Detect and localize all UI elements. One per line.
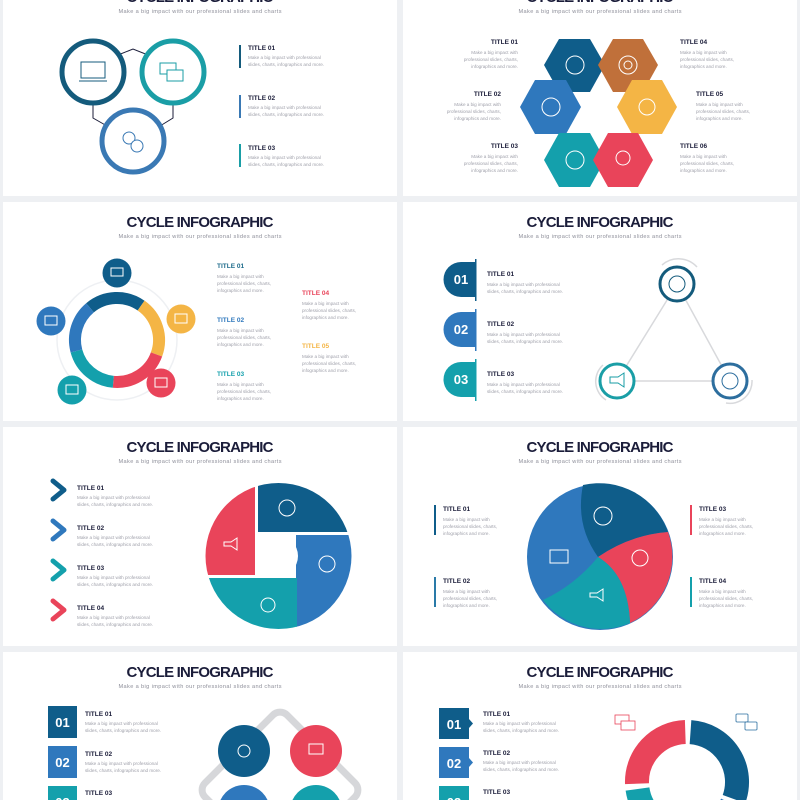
number squares (439, 708, 473, 800)
text items: slides, charts, infographics and more. (85, 728, 161, 733)
text items: TITLE 01 (85, 711, 112, 718)
subtitle: Make a big impact with our professional slides and charts (118, 234, 282, 240)
text items (217, 263, 356, 401)
text items: infographics and more. (217, 288, 264, 293)
text items: Make a big impact with (680, 50, 727, 55)
text items: TITLE 01 (483, 711, 510, 718)
text items: TITLE 06 (680, 143, 707, 150)
text items: infographics and more. (454, 116, 501, 121)
text items: TITLE 02 (483, 750, 510, 757)
heading: CYCLE INFOGRAPHIC (526, 439, 674, 456)
subtitle: Make a big impact with our professional slides and charts (518, 459, 682, 465)
text items: TITLE 03 (699, 506, 726, 513)
text items: infographics and more. (443, 531, 490, 536)
text items: TITLE 01 (248, 45, 275, 52)
text items: TITLE 03 (487, 371, 514, 378)
number badges (444, 259, 476, 401)
text items: infographics and more. (217, 396, 264, 401)
text items: TITLE 01 (217, 263, 244, 270)
number squares: 02 (55, 755, 70, 770)
text items: Make a big impact with (217, 382, 264, 387)
text items: Make a big impact with professional (77, 495, 150, 500)
text items: slides, charts, infographics and more. (483, 767, 559, 772)
text items: TITLE 02 (487, 321, 514, 328)
number squares: 02 (447, 756, 461, 771)
text items: TITLE 03 (491, 143, 518, 150)
number squares (48, 706, 77, 800)
text items: professional slides, charts, (217, 335, 271, 340)
panel: slide 4 triangle (403, 202, 797, 421)
text items: TITLE 04 (680, 39, 707, 46)
text items: professional slides, charts, (443, 524, 497, 529)
text items: infographics and more. (699, 531, 746, 536)
subtitle: Make a big impact with our professional slides and charts (518, 234, 682, 240)
panel: slide 7 diamond circles (3, 652, 397, 800)
ring chart (57, 280, 177, 400)
text items: slides, charts, infographics and more. (487, 289, 563, 294)
text items: slides, charts, infographics and more. (85, 768, 161, 773)
text items: TITLE 01 (491, 39, 518, 46)
triangle diagram (596, 259, 752, 403)
heading: CYCLE INFOGRAPHIC (126, 664, 274, 681)
text items: slides, charts, infographics and more. (483, 728, 559, 733)
text items: TITLE 05 (696, 91, 723, 98)
text items: infographics and more. (696, 116, 743, 121)
number squares: 01 (55, 715, 70, 730)
text items: TITLE 04 (699, 578, 726, 585)
text items: TITLE 03 (483, 789, 510, 796)
text items: TITLE 02 (85, 751, 112, 758)
number badges: 01 (454, 272, 468, 287)
heading: CYCLE INFOGRAPHIC (126, 439, 274, 456)
text items: TITLE 04 (77, 605, 104, 612)
panel: slide 3 ring with five icons (3, 202, 397, 421)
text items: slides, charts, infographics and more. (487, 339, 563, 344)
text items: TITLE 02 (443, 578, 470, 585)
icon circles (36, 258, 196, 404)
subtitle: Make a big impact with our professional slides and charts (118, 9, 282, 15)
text items: slides, charts, infographics and more. (487, 389, 563, 394)
text items: professional slides, charts, (696, 109, 750, 114)
text items: slides, charts, infographics and more. (77, 622, 153, 627)
text items: professional slides, charts, (302, 361, 356, 366)
text items: Make a big impact with professional (77, 575, 150, 580)
text items: slides, charts, infographics and more. (248, 112, 324, 117)
text items: infographics and more. (302, 368, 349, 373)
heading: CYCLE INFOGRAPHIC (126, 214, 274, 231)
text items: professional slides, charts, (680, 161, 734, 166)
text items: TITLE 01 (487, 271, 514, 278)
text items: professional slides, charts, (680, 57, 734, 62)
text items: Make a big impact with (302, 354, 349, 359)
text items: Make a big impact with (471, 154, 518, 159)
subtitle: Make a big impact with our professional slides and charts (518, 9, 682, 15)
text items: infographics and more. (302, 315, 349, 320)
connectors (93, 49, 173, 126)
text items: professional slides, charts, (464, 161, 518, 166)
text items: Make a big impact with (471, 50, 518, 55)
pie chart (527, 483, 673, 630)
text items: TITLE 04 (302, 290, 329, 297)
ring arrows (637, 732, 737, 800)
icon: mail (615, 715, 635, 730)
text items: infographics and more. (217, 342, 264, 347)
text items: slides, charts, infographics and more. (248, 162, 324, 167)
text items (483, 711, 559, 796)
text items: Make a big impact with (443, 589, 490, 594)
text items: TITLE 02 (474, 91, 501, 98)
panel: slide 6 swirl pie (403, 427, 797, 646)
panel: slide 1 three circles (3, 0, 397, 196)
number badges: 02 (454, 322, 468, 337)
text items: TITLE 02 (77, 525, 104, 532)
circle: laptop (62, 41, 124, 103)
text items: TITLE 03 (217, 371, 244, 378)
text items: Make a big impact with (699, 517, 746, 522)
text items: Make a big impact with professional (77, 535, 150, 540)
text items: Make a big impact with (302, 301, 349, 306)
panel: slide 5 pinwheel (3, 427, 397, 646)
text items: professional slides, charts, (699, 596, 753, 601)
text items: Make a big impact with professional (487, 282, 560, 287)
chevrons (53, 481, 64, 619)
text items (434, 505, 753, 608)
text items: Make a big impact with (454, 102, 501, 107)
text items: TITLE 03 (248, 145, 275, 152)
text items: slides, charts, infographics and more. (77, 582, 153, 587)
diamond diagram (198, 708, 362, 800)
text items: Make a big impact with (699, 589, 746, 594)
pinwheel chart (206, 483, 352, 629)
text items: Make a big impact with professional (487, 382, 560, 387)
heading: CYCLE INFOGRAPHIC (526, 664, 674, 681)
text items: Make a big impact with professional (248, 105, 321, 110)
text items: Make a big impact with (217, 328, 264, 333)
text items: professional slides, charts, (302, 308, 356, 313)
text items (239, 45, 324, 167)
number badges: 03 (454, 372, 468, 387)
subtitle: Make a big impact with our professional slides and charts (118, 459, 282, 465)
circle: chat (102, 110, 164, 172)
number squares: 01 (447, 717, 461, 732)
text items: slides, charts, infographics and more. (77, 542, 153, 547)
text items: Make a big impact with professional (248, 155, 321, 160)
heading: CYCLE INFOGRAPHIC (526, 214, 674, 231)
text items: TITLE 03 (77, 565, 104, 572)
text items: Make a big impact with professional (85, 721, 158, 726)
text items: Make a big impact with (217, 274, 264, 279)
text items: infographics and more. (471, 168, 518, 173)
text items: TITLE 01 (443, 506, 470, 513)
text items (77, 485, 153, 627)
text items: professional slides, charts, (447, 109, 501, 114)
text items: Make a big impact with (443, 517, 490, 522)
text items: Make a big impact with professional (85, 761, 158, 766)
text items: professional slides, charts, (699, 524, 753, 529)
text items: Make a big impact with professional (483, 721, 556, 726)
text items: TITLE 02 (217, 317, 244, 324)
text items: TITLE 03 (85, 790, 112, 797)
text items (487, 271, 563, 394)
panel: slide 2 hexagons (403, 0, 797, 196)
text items: infographics and more. (443, 603, 490, 608)
hexagons (520, 39, 677, 187)
icon: chat (736, 714, 757, 730)
text items (447, 39, 750, 173)
text items: infographics and more. (680, 64, 727, 69)
text items: infographics and more. (699, 603, 746, 608)
text items: professional slides, charts, (443, 596, 497, 601)
text items: Make a big impact with professional (487, 332, 560, 337)
text items: Make a big impact with professional (248, 55, 321, 60)
text items: Make a big impact with professional (77, 615, 150, 620)
text items: TITLE 01 (77, 485, 104, 492)
text items: infographics and more. (680, 168, 727, 173)
text items: Make a big impact with professional (483, 760, 556, 765)
text items (85, 711, 161, 797)
circle: mail (142, 41, 204, 103)
text items: TITLE 05 (302, 343, 329, 350)
text items: slides, charts, infographics and more. (248, 62, 324, 67)
subtitle: Make a big impact with our professional slides and charts (518, 684, 682, 690)
text items: slides, charts, infographics and more. (77, 502, 153, 507)
text items: Make a big impact with (696, 102, 743, 107)
subtitle: Make a big impact with our professional slides and charts (118, 684, 282, 690)
text items: infographics and more. (471, 64, 518, 69)
text items: professional slides, charts, (217, 389, 271, 394)
text items: TITLE 02 (248, 95, 275, 102)
text items: professional slides, charts, (217, 281, 271, 286)
panel: slide 8 arrow ring (403, 652, 797, 800)
text items: Make a big impact with (680, 154, 727, 159)
text items: professional slides, charts, (464, 57, 518, 62)
